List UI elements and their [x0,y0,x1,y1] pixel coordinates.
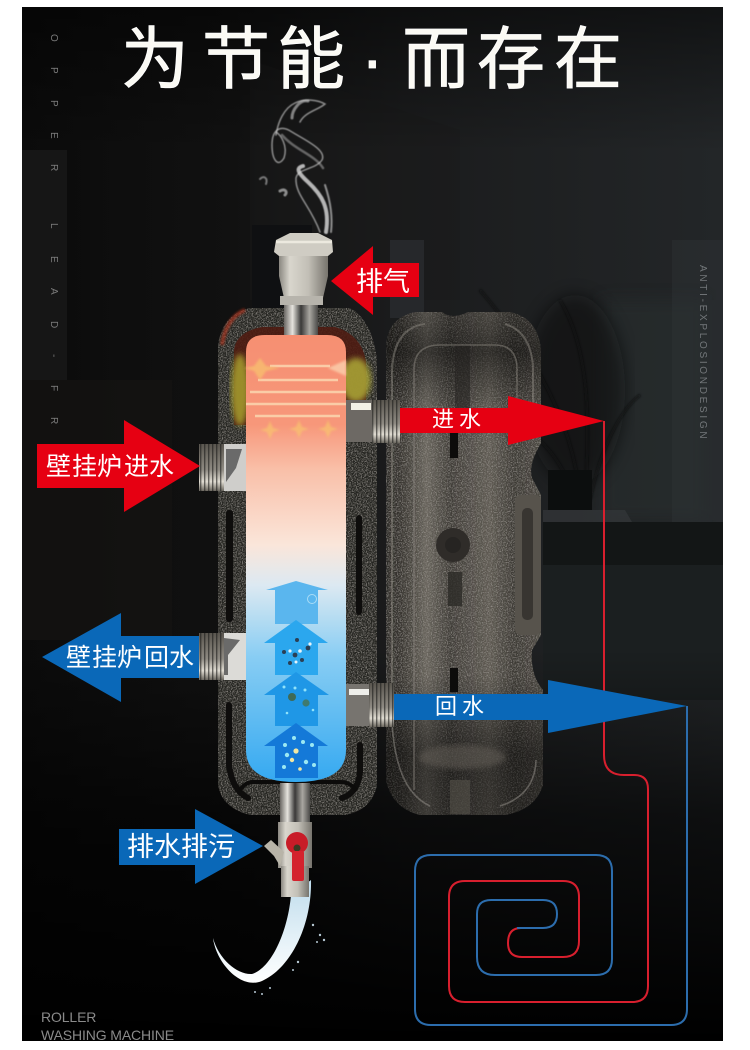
left half of foam insulation shell [218,308,377,815]
vertical side text: OPPER LEAD-FR: D [48,321,59,328]
blue return water pipe [415,706,687,1025]
arrow 1 [266,581,328,624]
red hot water pipe [449,421,648,1002]
left lower port [199,633,246,680]
footer text: ROLLER WASHING MACHINE [41,1012,174,1040]
arrow 2 [264,620,328,675]
arrow: 壁挂炉回水 [42,613,199,702]
vertical side text: OPPER LEAD-FR: E [48,256,59,263]
heat sparkles [244,358,346,439]
vertical side text: OPPER LEAD-FR: L [48,223,59,229]
right half of foam insulation shell [386,312,543,815]
arrow: 进水: 进水 [432,407,481,432]
vertical side text: OPPER LEAD-FR: P [48,67,59,74]
vertical side text: OPPER LEAD-FR: A [48,288,59,295]
arrow 3 [264,672,329,726]
arrow: 回水: 回水 [435,694,484,719]
vertical side text: ANTI-EXPLOSIONDESIGN: ANTI-EXPLOSIONDESIGN [697,265,708,441]
arrow: 排水排污 [119,809,263,884]
right lower port [346,683,394,727]
vertical side text: OPPER LEAD-FR: E [48,132,59,139]
vertical side text: OPPER LEAD-FR: P [48,100,59,107]
water tank with heat gradient [244,335,346,782]
arrow 4 [264,723,328,778]
arrow: 排气 [331,246,419,315]
vertical side text: OPPER LEAD-FR: - [48,354,59,357]
footer text: ROLLER WASHING MACHINE: WASHING MACHINE [41,1027,174,1043]
left upper port [199,444,247,491]
arrow: 排气: 排气 [356,267,410,297]
arrow: 壁挂炉进水: 壁挂炉进水 [46,453,174,481]
water droplets [254,924,325,995]
arrow: 壁挂炉回水: 壁挂炉回水 [66,644,194,672]
arrow: 壁挂炉进水 [37,420,200,512]
title: 为节能·而存在 [121,22,622,98]
water stream [213,880,311,983]
vertical side text: OPPER LEAD-FR: O [48,34,59,42]
heat ribs [246,366,346,416]
vertical side text: OPPER LEAD-FR [48,34,59,424]
arrow: 回水 [394,680,687,733]
floor heating coil pipes [415,421,687,1025]
arrow: 进水 [400,396,604,445]
smoke from vent valve [260,100,332,232]
vent valve [274,233,333,337]
footer text: ROLLER WASHING MACHINE: ROLLER [41,1009,96,1025]
vertical side text: OPPER LEAD-FR: F [48,385,59,391]
vertical side text: OPPER LEAD-FR: R [48,417,59,424]
arrow: 排水排污: 排水排污 [127,832,235,862]
vertical side text: OPPER LEAD-FR: R [48,164,59,171]
right upper port [346,400,400,443]
drain pipe and ball valve [213,783,325,995]
rising water arrows in tank [264,581,329,778]
